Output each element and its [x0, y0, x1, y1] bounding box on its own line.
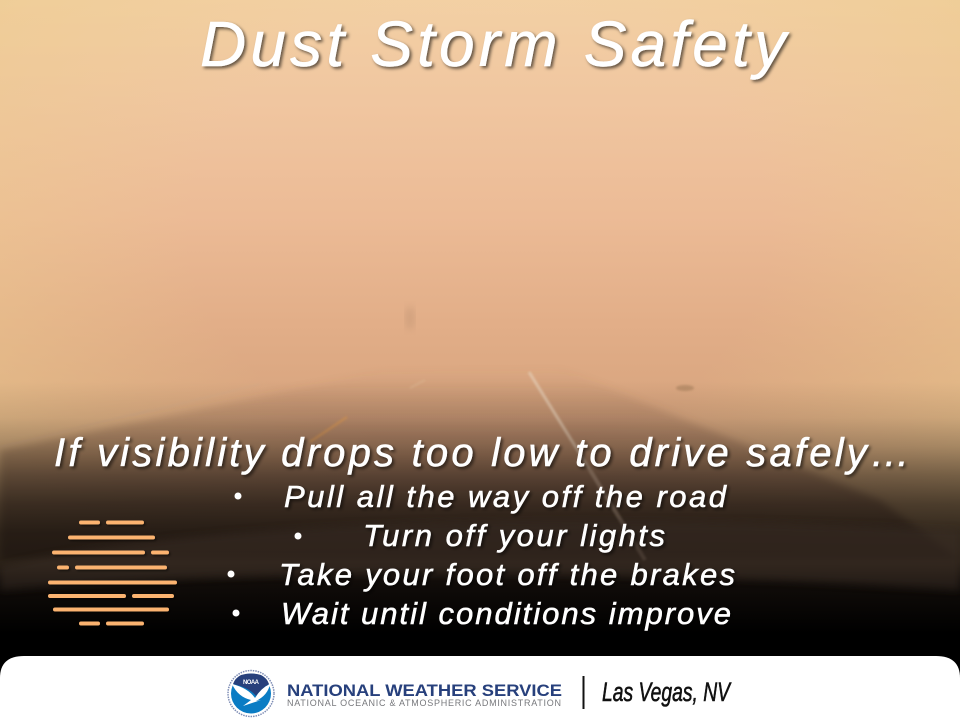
- list item: pull off the road: Pull all the way off the road: [284, 479, 728, 514]
- office label: Las Vegas, NV: Las Vegas, NV: [602, 677, 732, 707]
- wordmark: National Weather Service: [287, 681, 562, 708]
- footer panel: [0, 656, 960, 720]
- list item: turn off lights: Turn off your lights: [363, 518, 665, 553]
- wordmark: National Weather Service: NATIONAL WEATHER SERVICE: [287, 681, 562, 700]
- subheading: If visibility drops too low to drive safely…: [54, 431, 910, 475]
- list item: foot off brakes: Take your foot off the brakes: [279, 557, 735, 592]
- icon: NOAA logo: NOAA: [243, 680, 260, 686]
- icon: NOAA logo: [228, 670, 274, 716]
- icon: dust cloud lines: [50, 522, 175, 624]
- title: Dust Storm Safety: [200, 8, 790, 80]
- text block: safety instructions: [54, 431, 910, 631]
- list item: wait for improvement: Wait until conditions improve: [281, 596, 731, 631]
- wordmark: National Weather Service: NATIONAL OCEANIC & ATMOSPHERIC ADMINISTRATION: [287, 698, 561, 708]
